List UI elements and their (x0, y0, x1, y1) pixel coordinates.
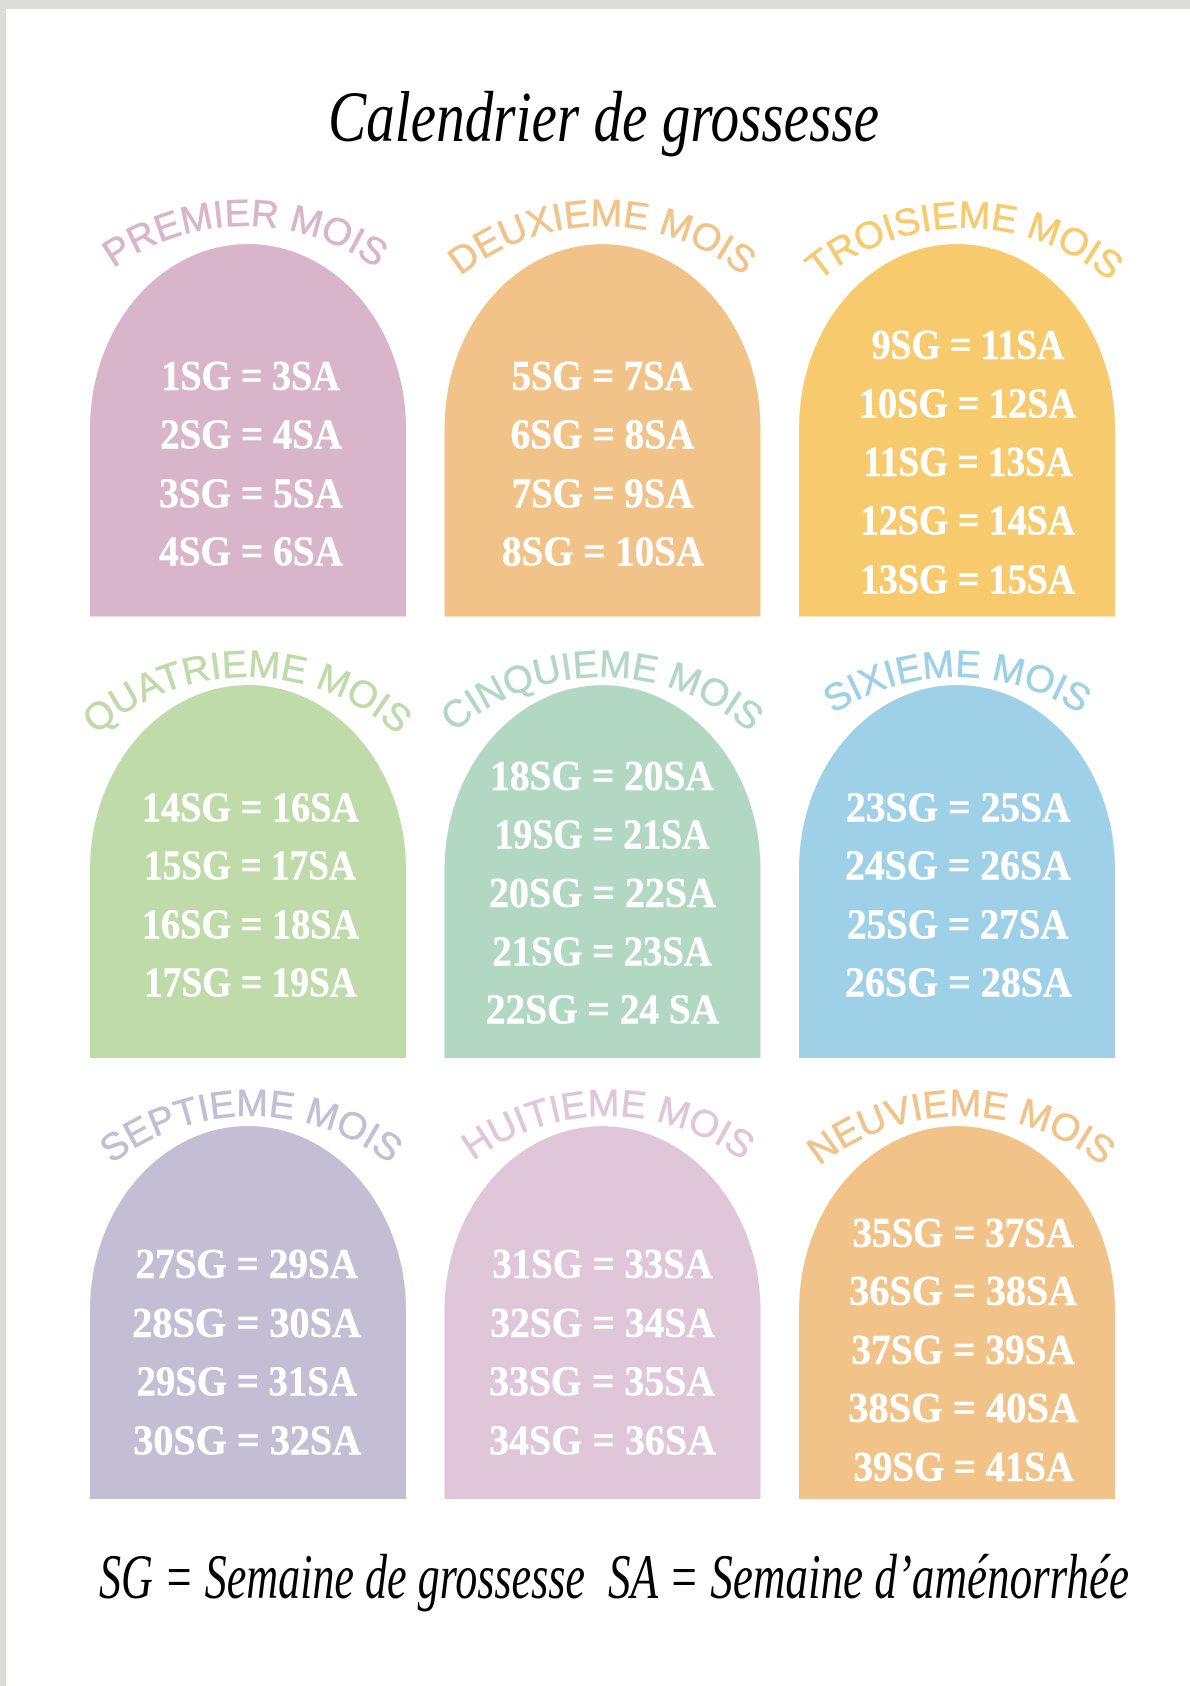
week list: 32SG = 34SA (490, 1301, 716, 1347)
week list (502, 354, 705, 576)
week list: 14SG = 16SA (142, 785, 360, 831)
week list: 13SG = 15SA (860, 557, 1076, 603)
heading: quatrieme mois: QUATRIEME MOIS (85, 650, 410, 732)
arch shape (799, 685, 1115, 1058)
week list (486, 754, 720, 1033)
week list: 30SG = 32SA (133, 1418, 362, 1464)
week list (845, 785, 1072, 1006)
week list: 25SG = 27SA (847, 902, 1069, 948)
arch shape (444, 244, 760, 616)
week list: 10SG = 12SA (859, 382, 1077, 428)
panel: neuvieme mois (799, 1090, 1115, 1499)
week list: 28SG = 30SA (132, 1301, 362, 1347)
arch shape (799, 1126, 1115, 1499)
week list: 18SG = 20SA (490, 754, 714, 800)
week list: 21SG = 23SA (492, 929, 712, 975)
week list: 19SG = 21SA (494, 812, 710, 858)
legend: SG: SG = Semaine de grossesse (99, 1541, 585, 1612)
footer legend (99, 1541, 1129, 1612)
title: Calendrier de grossesse (328, 77, 879, 157)
heading: septieme mois: SEPTIEME MOIS (101, 1090, 401, 1160)
arch shape (90, 244, 406, 616)
arch shape (90, 1126, 406, 1499)
arch shape (799, 244, 1115, 616)
week list: 7SG = 9SA (512, 471, 694, 517)
week list: 11SG = 13SA (863, 440, 1073, 486)
week list: 23SG = 25SA (846, 785, 1071, 831)
arch shape (90, 685, 406, 1058)
week list: 34SG = 36SA (489, 1418, 717, 1464)
heading: deuxieme mois: DEUXIEME MOIS (447, 199, 755, 274)
week list (489, 1242, 717, 1464)
week list (859, 323, 1077, 603)
arch shape (444, 685, 760, 1058)
week list: 27SG = 29SA (136, 1242, 359, 1288)
week list: 38SG = 40SA (848, 1386, 1079, 1432)
arch shape (444, 1126, 760, 1499)
week list: 16SG = 18SA (142, 902, 360, 948)
week list: 5SG = 7SA (512, 354, 693, 400)
heading: sixieme mois: SIXIEME MOIS (824, 650, 1090, 710)
week list: 35SG = 37SA (852, 1211, 1075, 1257)
panel: cinquieme mois (444, 650, 762, 1058)
week list: 12SG = 14SA (860, 498, 1076, 544)
panel: huitieme mois (444, 1089, 760, 1499)
panel: septieme mois (90, 1090, 406, 1499)
week list (848, 1211, 1079, 1491)
week list: 24SG = 26SA (845, 844, 1071, 890)
panel: deuxieme mois (444, 199, 760, 616)
week list: 6SG = 8SA (511, 412, 695, 458)
panel: sixieme mois (799, 650, 1115, 1058)
heading: cinquieme mois: CINQUIEME MOIS (444, 650, 762, 728)
week list: 4SG = 6SA (159, 530, 344, 576)
week list: 31SG = 33SA (492, 1242, 713, 1288)
week list (132, 1242, 362, 1464)
week list: 36SG = 38SA (849, 1269, 1078, 1315)
week list: 3SG = 5SA (159, 471, 344, 517)
week list (159, 354, 344, 576)
panel: troisieme mois (799, 201, 1122, 616)
week list: 9SG = 11SA (872, 323, 1065, 369)
week list: 17SG = 19SA (144, 960, 357, 1006)
week list: 33SG = 35SA (489, 1359, 716, 1405)
week list: 20SG = 22SA (489, 871, 717, 917)
heading: huitieme mois: HUITIEME MOIS (460, 1089, 754, 1160)
week list: 15SG = 17SA (144, 844, 356, 890)
heading: premier mois: PREMIER MOIS (102, 199, 386, 267)
week list: 22SG = 24 SA (486, 987, 720, 1033)
panel: premier mois (90, 199, 406, 616)
heading: troisieme mois: TROISIEME MOIS (803, 201, 1122, 278)
week list: 37SG = 39SA (851, 1328, 1076, 1374)
week list: 26SG = 28SA (845, 960, 1072, 1006)
week list: 1SG = 3SA (161, 354, 340, 400)
week list: 29SG = 31SA (136, 1359, 358, 1405)
week list: 2SG = 4SA (160, 412, 343, 458)
week list: 39SG = 41SA (854, 1445, 1075, 1491)
week list (142, 785, 360, 1006)
panel: quatrieme mois (85, 650, 410, 1058)
week list: 8SG = 10SA (502, 530, 705, 576)
heading: neuvieme mois: NEUVIEME MOIS (806, 1090, 1114, 1164)
